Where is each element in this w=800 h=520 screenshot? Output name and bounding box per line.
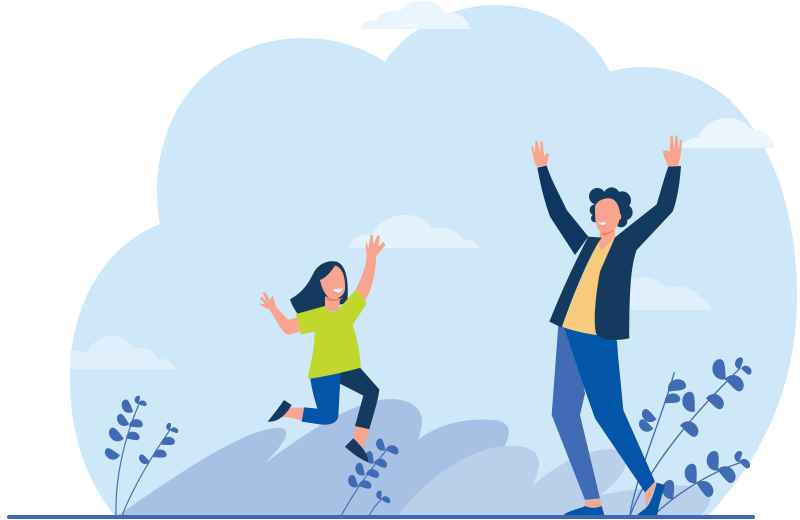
girl: hair — [290, 261, 348, 315]
man — [531, 135, 682, 515]
plant: left short — [122, 423, 179, 515]
plant: right upper stem — [629, 372, 687, 518]
hill: lighter bushes — [398, 446, 710, 516]
girl — [259, 235, 385, 462]
plant: right low — [657, 450, 752, 513]
cloud: behind girl — [349, 215, 480, 248]
cloud: top right — [680, 118, 775, 148]
man: legs and shoes — [552, 325, 665, 515]
plant: left tall — [103, 395, 147, 515]
cloud: top — [360, 1, 470, 29]
girl: lower legs and shoes — [268, 400, 369, 462]
ground line — [7, 515, 755, 519]
girl: trousers — [302, 368, 379, 429]
cloud: behind man — [625, 277, 712, 310]
girl: arms — [259, 235, 385, 335]
hill: darker bushes — [117, 399, 509, 516]
plant: right tall — [629, 357, 753, 518]
cloud: left — [70, 336, 176, 369]
man: torso, arms and head — [531, 135, 682, 340]
plant: centre — [342, 438, 400, 515]
girl: face and smile — [320, 266, 345, 311]
plant: centre small — [369, 490, 391, 515]
girl: green shirt — [296, 289, 367, 379]
